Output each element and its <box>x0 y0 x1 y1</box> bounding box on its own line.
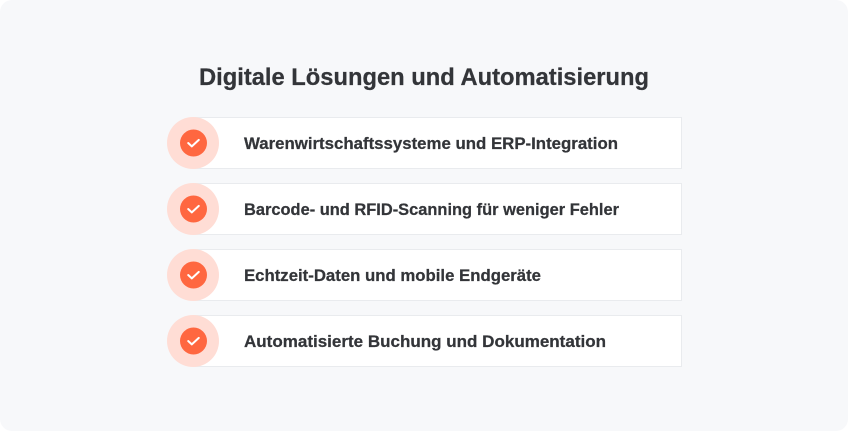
item 4 <box>167 315 682 367</box>
icon: check 1 <box>167 117 219 169</box>
label 4: Automatisierte Buchung und Dokumentation <box>244 332 606 351</box>
card 2 <box>194 184 682 234</box>
item 2 <box>167 183 682 235</box>
card 3 <box>194 250 682 300</box>
icon: check 4 <box>167 315 219 367</box>
card 4 <box>194 316 682 366</box>
card 1 <box>194 118 682 168</box>
label 3: Echtzeit-Daten und mobile Endgeräte <box>244 266 541 285</box>
title: Digitale Lösungen und Automatisierung <box>199 64 649 91</box>
label 2: Barcode- und RFID-Scanning für weniger Fehler <box>244 200 619 219</box>
icon: check 3 <box>167 249 219 301</box>
label 1: Warenwirtschaftssysteme und ERP-Integration <box>244 134 618 153</box>
item 3 <box>167 249 682 301</box>
icon: check 2 <box>167 183 219 235</box>
item 1 <box>167 117 682 169</box>
